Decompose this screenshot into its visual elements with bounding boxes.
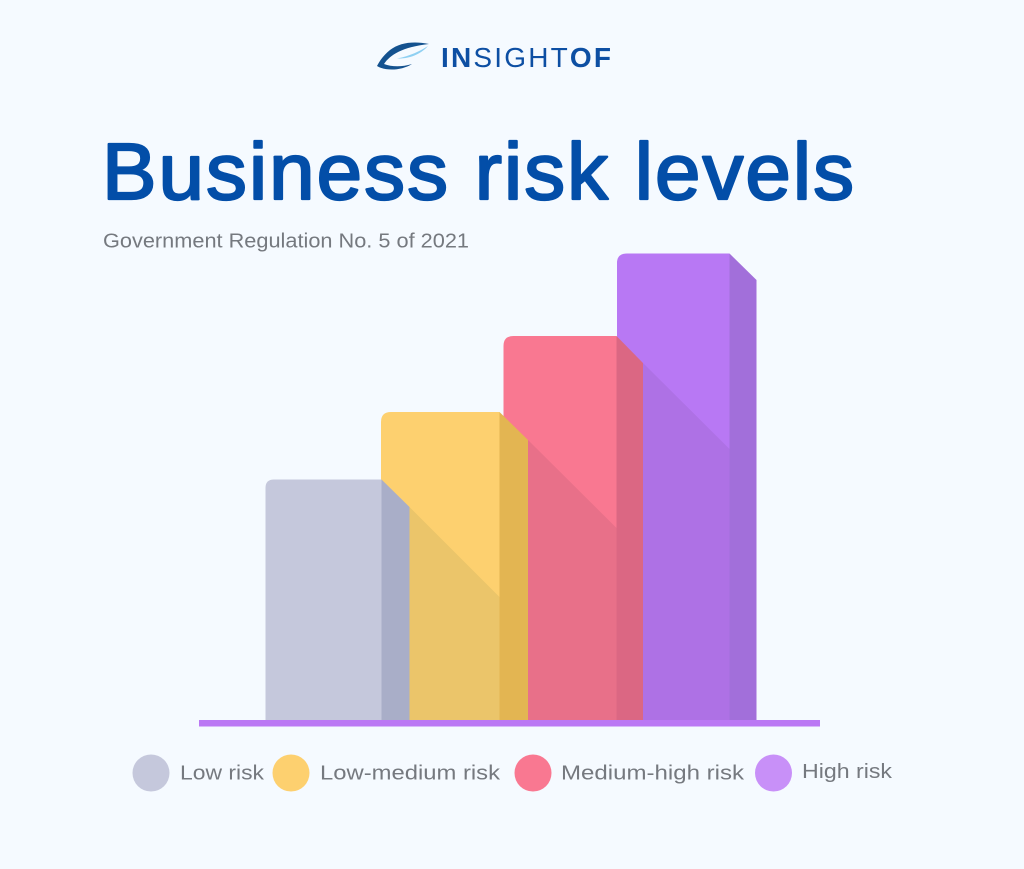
legend item: medium-high risk: Medium-high risk bbox=[561, 762, 745, 784]
legend bbox=[132, 754, 893, 792]
legend item: high risk: High risk bbox=[802, 761, 893, 783]
subtitle: Government Regulation No. 5 of 2021 bbox=[103, 230, 469, 252]
chart baseline bbox=[199, 720, 820, 726]
bar: high risk bbox=[617, 254, 756, 720]
logo wordmark: INSIGHTOF bbox=[441, 42, 611, 73]
logo: Insightof bbox=[377, 42, 611, 73]
legend item: low risk bbox=[132, 754, 265, 792]
bar: low-medium risk bbox=[381, 412, 528, 720]
title: Business risk levels bbox=[102, 127, 856, 216]
bar: medium-high risk bbox=[504, 336, 643, 720]
icon: leaf mark bbox=[377, 42, 429, 70]
legend item: low-medium risk bbox=[272, 754, 501, 792]
legend item: high risk bbox=[755, 754, 893, 792]
bar: low risk bbox=[266, 480, 410, 720]
legend item: low risk: Low risk bbox=[180, 762, 265, 784]
bar chart bbox=[199, 254, 820, 726]
legend item: low-medium risk: Low-medium risk bbox=[320, 762, 501, 784]
legend item: medium-high risk bbox=[514, 754, 745, 792]
